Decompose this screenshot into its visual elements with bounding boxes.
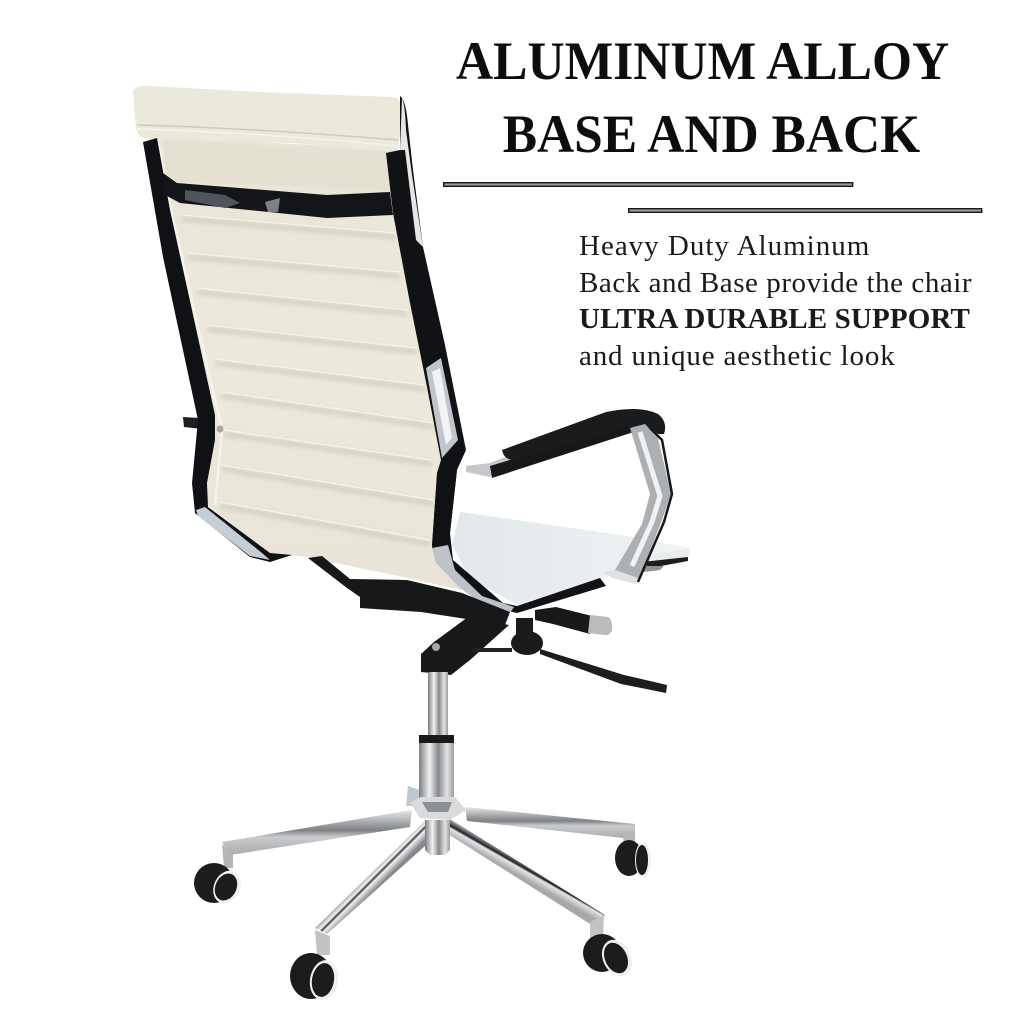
- title: BASE AND BACK: [503, 104, 920, 164]
- seat: [452, 512, 690, 605]
- right armrest: [466, 409, 672, 584]
- title: [456, 31, 949, 164]
- description text: [579, 230, 972, 372]
- description text: and unique aesthetic look: [579, 340, 896, 372]
- divider lines: [443, 182, 982, 213]
- back frame: [143, 96, 606, 613]
- gas lift column: [419, 672, 454, 801]
- left armrest stub: [183, 417, 224, 432]
- headrest: [133, 86, 403, 152]
- star base: [222, 797, 635, 955]
- description text: Back and Base provide the chair: [579, 266, 972, 298]
- title: ALUMINUM ALLOY: [456, 31, 949, 91]
- casters: [194, 840, 651, 1002]
- description text: ULTRA DURABLE SUPPORT: [579, 303, 970, 335]
- backrest cushion: [150, 135, 462, 590]
- hidden rear leg: [406, 786, 420, 806]
- description text: Heavy Duty Aluminum: [579, 230, 870, 262]
- seat mechanism and lever: [308, 556, 667, 693]
